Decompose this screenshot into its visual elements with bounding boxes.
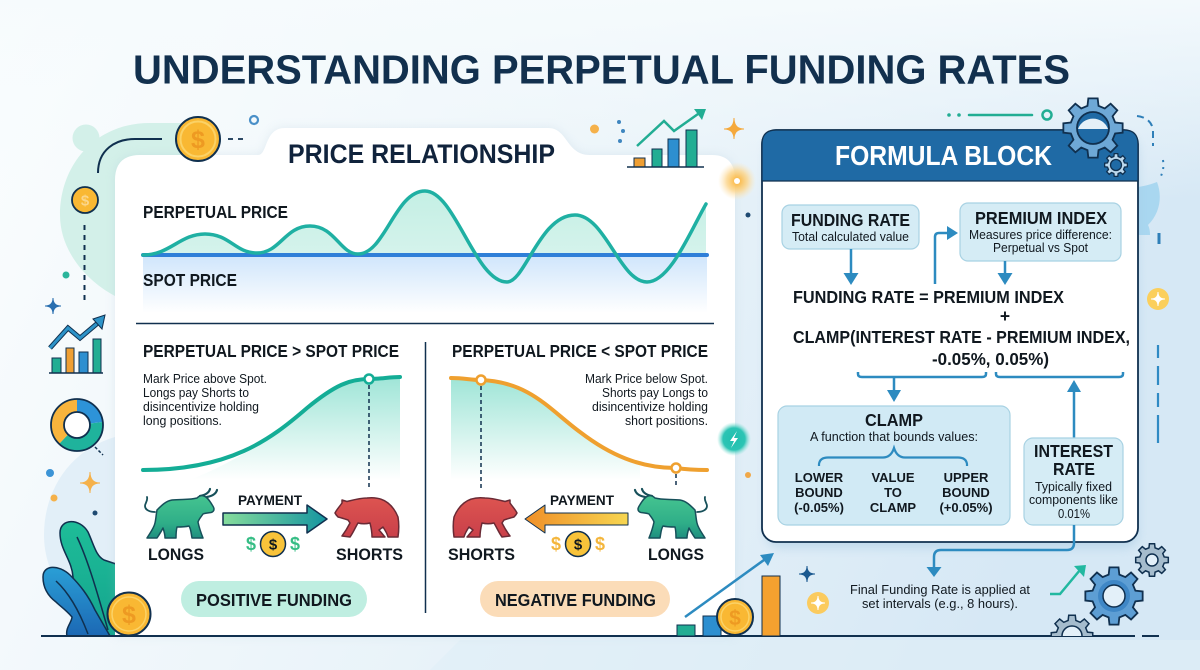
box: clamp: (+0.05%): [939, 500, 993, 515]
glow: orange: [718, 162, 756, 200]
icon: coins: $: [290, 534, 300, 554]
header band: [762, 130, 1138, 181]
formula text: [793, 287, 1130, 369]
subheading: PERPETUAL PRICE > SPOT PRICE: [143, 341, 399, 361]
arrow: teal: [1050, 565, 1086, 594]
label: shorts: SHORTS: [448, 546, 515, 564]
dot: [746, 212, 750, 218]
explanation: short positions.: [625, 414, 708, 428]
explanation: Shorts pay Longs to: [602, 386, 708, 400]
chart: perpetual vs spot price: [143, 191, 707, 313]
box: premium index: Perpetual vs Spot: [993, 240, 1088, 255]
panel background: [115, 128, 735, 636]
label: longs: LONGS: [148, 546, 204, 564]
explanation: Mark Price below Spot.: [585, 372, 708, 386]
box: clamp: CLAMP: [865, 410, 923, 430]
box: interest rate: 0.01%: [1058, 507, 1090, 521]
dot: [62, 272, 70, 278]
dotted arc right: [1161, 160, 1163, 176]
section: positive funding: [143, 341, 403, 617]
box: funding rate: Total calculated value: [792, 229, 909, 244]
box: premium index: Measures price difference:: [969, 227, 1112, 242]
decorative blob: teal: [60, 123, 190, 296]
star: yellow glow: [1147, 288, 1169, 310]
box: clamp: VALUE: [871, 470, 915, 485]
decorative blob: right blue: [1138, 182, 1160, 235]
label: spot price: SPOT PRICE: [143, 270, 237, 290]
panel: formula block: [762, 130, 1138, 548]
box: clamp: [778, 406, 1010, 525]
box: interest rate: RATE: [1053, 459, 1095, 479]
icon: lightning badge: [717, 422, 751, 456]
panel: price relationship: [115, 128, 735, 636]
star: orange: [724, 118, 744, 139]
icon: bear: [335, 498, 399, 537]
accent tick: [1158, 233, 1160, 244]
note: final funding rate: set intervals (e.g., 8 hours).: [862, 596, 1018, 611]
dot: [745, 472, 751, 478]
icon: bar chart left: [49, 315, 105, 373]
top accent line: [947, 110, 1052, 120]
icon: coin at plant: $: [122, 601, 136, 629]
note: final funding rate: Final Funding Rate is applied at: [850, 582, 1030, 597]
box: clamp: UPPER: [944, 470, 989, 485]
box: interest rate: [1024, 438, 1123, 525]
label: payment: PAYMENT: [550, 492, 614, 508]
badge: negative funding: [480, 581, 670, 617]
box: clamp: TO: [884, 485, 902, 500]
arrow: formula to premium index: [935, 226, 958, 284]
icon: small coin: $: [81, 192, 90, 210]
icon: bull: [635, 489, 707, 538]
box: funding rate: [782, 205, 919, 249]
subheading: PERPETUAL PRICE < SPOT PRICE: [452, 341, 708, 361]
baseline: [41, 635, 1159, 637]
panel shadow and body: [762, 130, 1138, 548]
dots and star: [46, 469, 100, 516]
star: navy: [799, 566, 815, 582]
arrow: interest rate to bracket: [1067, 380, 1081, 438]
accent: yellow line: [1156, 455, 1158, 487]
icon: small gear top: [1105, 154, 1127, 176]
arrow: interest rate to final note: [926, 525, 1074, 577]
dashed line right: [1157, 345, 1159, 443]
icon: grey gear: [1136, 544, 1168, 576]
box: premium index: PREMIUM INDEX: [975, 208, 1107, 228]
box: interest rate: components like: [1029, 493, 1118, 507]
plant leaves: [43, 522, 116, 636]
badge: positive funding: POSITIVE FUNDING: [196, 590, 352, 610]
dots top: [590, 120, 625, 143]
box: clamp: LOWER: [795, 470, 844, 485]
connector line: [98, 139, 162, 173]
box: interest rate: INTEREST: [1034, 441, 1113, 461]
box: clamp: (-0.05%): [794, 500, 844, 515]
icon: donut chart: [51, 399, 103, 455]
icon: blue gear: [1085, 567, 1143, 625]
arrow: bracket to clamp: [887, 377, 901, 402]
icon: coins: $: [574, 536, 583, 554]
icon: bar chart top: [627, 109, 706, 167]
icon: bull: [145, 489, 217, 538]
icon: large gear top: [1063, 98, 1123, 158]
dashes: [228, 138, 243, 140]
icon: small coin: [72, 187, 98, 213]
icon: bear: [453, 498, 517, 537]
explanation: disincentivize holding: [592, 400, 708, 414]
label: longs: LONGS: [648, 546, 704, 564]
section: negative funding: [448, 341, 708, 617]
icon: base gear: [1050, 614, 1094, 636]
box: premium index: [960, 203, 1121, 261]
box: clamp: A function that bounds values:: [810, 429, 978, 444]
curve: perpetual below spot: [451, 376, 707, 488]
dashed arc right: [1137, 116, 1153, 146]
icon: coin at plant: [108, 592, 150, 636]
icon: growth bars bottom: $: [729, 607, 741, 630]
explanation: Longs pay Shorts to: [143, 386, 249, 400]
brackets under formula: [858, 372, 1123, 377]
icon: coins: $: [269, 536, 278, 554]
badge: negative funding: NEGATIVE FUNDING: [495, 590, 656, 610]
formula text: +: [1000, 306, 1010, 326]
icon: coins: $: [246, 534, 256, 554]
label: payment: PAYMENT: [238, 492, 302, 508]
label: perpetual price: PERPETUAL PRICE: [143, 202, 288, 222]
heading: price relationship: PRICE RELATIONSHIP: [288, 139, 555, 169]
ring dot: [250, 116, 258, 124]
curve: perpetual above spot: [143, 374, 400, 488]
formula text: CLAMP(INTEREST RATE - PREMIUM INDEX,: [793, 327, 1130, 347]
icon: coins: [246, 532, 300, 556]
explanation: Mark Price above Spot.: [143, 372, 267, 386]
arrow: payment to shorts: [223, 505, 327, 533]
arrow: funding rate to formula: [844, 249, 858, 285]
formula text: FUNDING RATE = PREMIUM INDEX: [793, 287, 1064, 307]
heading: formula block: FORMULA BLOCK: [835, 140, 1052, 171]
formula text: -0.05%, 0.05%): [932, 349, 1049, 369]
box: clamp: BOUND: [942, 485, 990, 500]
decorative blob: pale blue: [44, 437, 115, 630]
icon: coins: [551, 532, 605, 556]
label: shorts: SHORTS: [336, 546, 403, 564]
box: clamp: BOUND: [795, 485, 843, 500]
dashed line: [84, 225, 86, 300]
star: blue: [45, 298, 61, 314]
icon: coin top: $: [191, 126, 205, 154]
arrow: premium index to formula: [998, 261, 1012, 285]
badge: positive funding: [181, 581, 367, 617]
explanation: disincentivize holding: [143, 400, 259, 414]
icon: coins: $: [595, 534, 605, 554]
arrow: payment to shorts: [525, 505, 628, 533]
box: clamp: CLAMP: [870, 500, 916, 515]
box: funding rate: FUNDING RATE: [791, 210, 910, 230]
explanation: long positions.: [143, 414, 222, 428]
box: interest rate: Typically fixed: [1035, 480, 1112, 494]
title: UNDERSTANDING PERPETUAL FUNDING RATES: [133, 46, 1070, 92]
icon: coins: $: [551, 534, 561, 554]
star: yellow badge: [807, 592, 829, 614]
icon: growth bars bottom: [677, 553, 780, 636]
icon: coin top: [176, 117, 220, 161]
